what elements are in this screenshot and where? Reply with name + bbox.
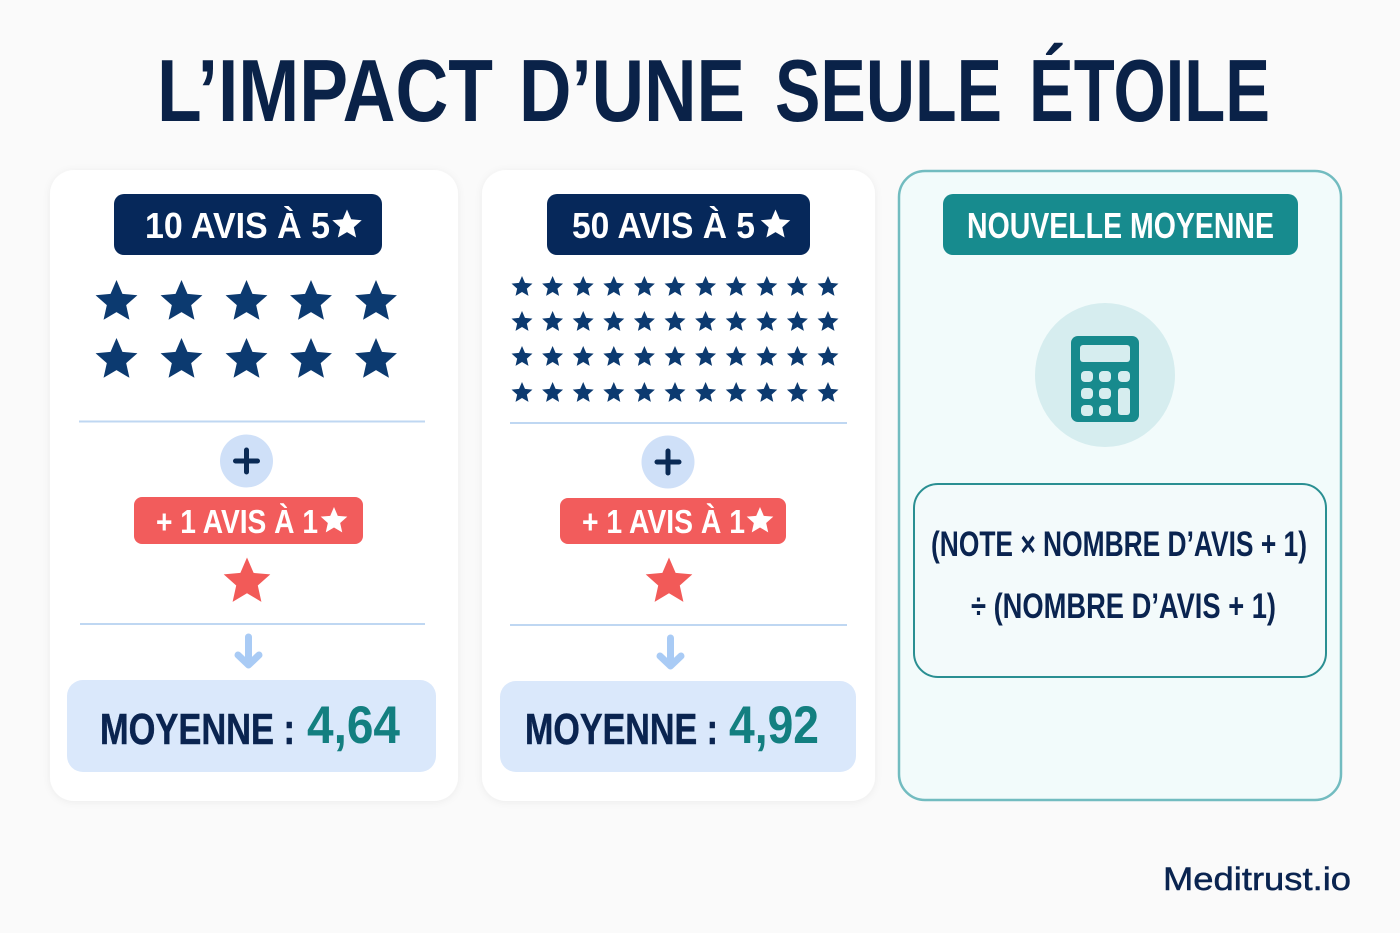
formula box <box>914 484 1326 677</box>
title: L’IMPACT <box>157 41 493 140</box>
title: ÉTOILE <box>1029 41 1270 140</box>
icon: plus <box>642 436 694 488</box>
panel: 50 avis <box>482 170 875 801</box>
heading: 50 avis à 5 étoiles: 50 AVIS À 5 <box>572 205 755 246</box>
heading: nouvelle moyenne <box>943 194 1298 255</box>
title: SEULE <box>775 41 1002 140</box>
logo: Meditrust.io: Meditrust.io <box>1163 861 1351 897</box>
result: moyenne 4,64 <box>67 680 436 772</box>
heading: 50 avis à 5 étoiles <box>547 194 810 255</box>
arrow: down <box>660 638 681 666</box>
icon: red star <box>224 558 270 602</box>
star grid: 10 stars <box>96 280 397 378</box>
badge: +1 avis à 1 étoile <box>134 497 363 544</box>
result: moyenne 4,92: MOYENNE : <box>525 705 718 754</box>
heading: nouvelle moyenne: NOUVELLE MOYENNE <box>967 205 1274 246</box>
result: moyenne 4,92: 4,92 <box>729 696 819 755</box>
title: D’UNE <box>519 41 745 140</box>
badge: +1 avis à 1 étoile: + 1 AVIS À 1 <box>582 503 745 540</box>
formula box: ÷ (NOMBRE D’AVIS + 1) <box>971 587 1276 626</box>
title <box>157 41 1270 140</box>
result: moyenne 4,64: MOYENNE : <box>100 705 295 754</box>
badge: +1 avis à 1 étoile: + 1 AVIS À 1 <box>156 503 318 540</box>
badge: +1 avis à 1 étoile <box>560 498 786 544</box>
icon: red star <box>646 558 692 602</box>
result: moyenne 4,64: 4,64 <box>307 696 400 755</box>
icon: calculator <box>1035 303 1175 447</box>
icon: plus <box>220 434 273 488</box>
panel: nouvelle moyenne <box>899 171 1341 800</box>
heading: 10 avis à 5 étoiles: 10 AVIS À 5 <box>145 205 330 246</box>
result: moyenne 4,92 <box>500 681 856 772</box>
panel: 10 avis <box>50 170 458 801</box>
arrow: down <box>238 637 259 665</box>
star grid: 44 stars <box>512 276 838 402</box>
heading: 10 avis à 5 étoiles <box>114 194 382 255</box>
